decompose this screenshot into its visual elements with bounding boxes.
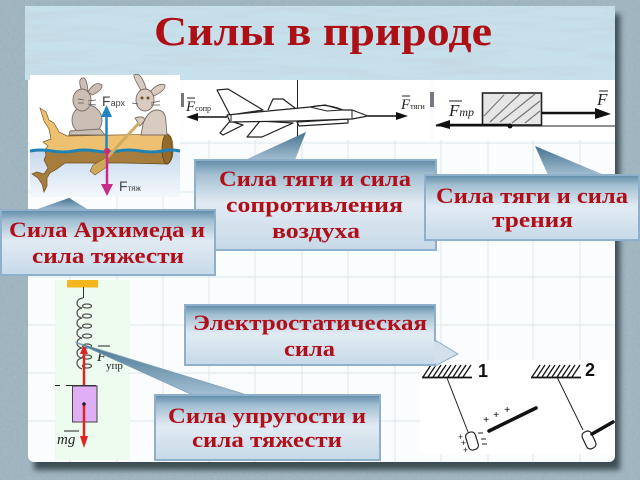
callout: thrust and friction: Сила тяги и сила <box>436 183 628 208</box>
callout: thrust and air resistance: сопротивления <box>226 192 403 217</box>
callout: Archimedes force and gravity: Сила Архимеда и <box>9 217 205 242</box>
force arrows <box>105 112 108 150</box>
illustration: rabbits on a log (Archimedes force and gravity) <box>30 74 180 197</box>
force labels: Fарх <box>102 93 125 109</box>
log top <box>40 108 173 151</box>
callout: elastic force and gravity <box>75 342 380 460</box>
title band <box>25 6 615 80</box>
callout: thrust and air resistance: Сила тяги и сила <box>219 166 411 191</box>
illustration: electrostatic attraction: + <box>493 409 499 421</box>
water line <box>30 150 180 152</box>
illustration: electrostatic attraction: + <box>461 438 466 448</box>
illustration: spring and load <box>55 280 130 460</box>
callout: Archimedes force and gravity: сила тяжести <box>32 243 184 268</box>
aircraft force labels: Fсопр <box>185 99 211 115</box>
illustration: block with friction force <box>434 80 615 140</box>
callout: electrostatic force <box>185 305 458 366</box>
title: Силы в природе <box>154 8 492 54</box>
charge signs: + <box>483 414 489 426</box>
illustration: electrostatic attraction: 2 <box>585 360 595 380</box>
illustration: electrostatic attraction: + <box>463 445 468 455</box>
callout: thrust and friction <box>425 146 639 240</box>
callout: thrust and air resistance: воздуха <box>272 218 360 243</box>
illustration: rabbits on a log (Archimedes force and gravity): Fтяж <box>119 178 142 194</box>
right rabbit <box>134 74 167 135</box>
illustration: aircraft with thrust and drag: Fтяги <box>400 97 426 113</box>
illustration: block with friction force: F <box>596 90 608 109</box>
log bottom <box>32 151 173 192</box>
callout: thrust and air resistance <box>195 132 436 250</box>
friction force labels: Fтр <box>448 101 474 120</box>
callout: thrust and friction: трения <box>492 207 573 232</box>
illustration: spring and load: упр <box>106 360 123 372</box>
illustration: electrostatic attraction: + <box>458 432 463 442</box>
callout: elastic force and gravity: Сила упругости и <box>168 403 366 428</box>
illustration: electrostatic attraction <box>420 360 615 455</box>
callout: elastic force and gravity: сила тяжести <box>192 427 342 452</box>
figure numbers: 1 <box>478 361 488 381</box>
callout: electrostatic force: Электростатическая <box>193 310 427 335</box>
callout: electrostatic force: сила <box>284 336 335 361</box>
oar <box>105 123 139 160</box>
illustration: spring and load: mg <box>57 432 76 448</box>
spring force labels: F <box>96 349 107 365</box>
callout: Archimedes force and gravity <box>1 198 215 275</box>
left rabbit <box>69 78 105 135</box>
illustration: aircraft with thrust and drag <box>181 80 434 140</box>
illustration: electrostatic attraction: + <box>504 404 510 416</box>
